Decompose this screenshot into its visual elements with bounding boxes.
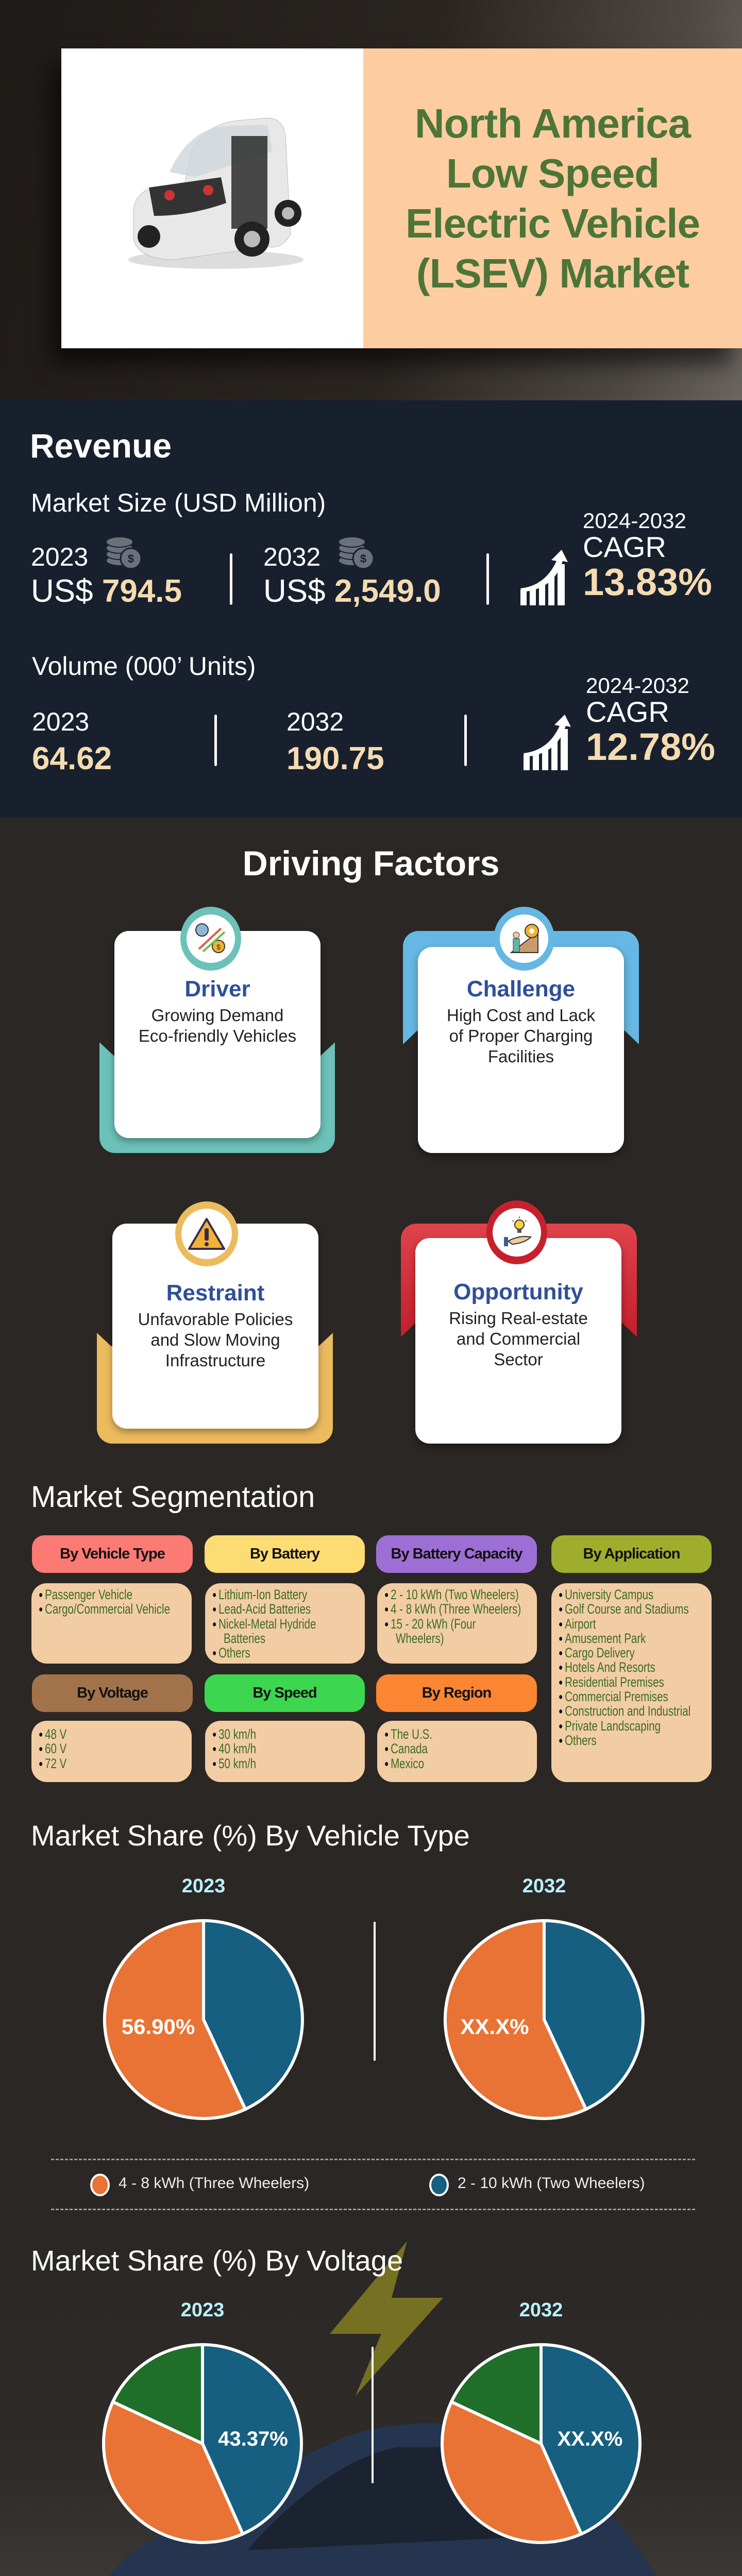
- panel: opportunity: Sector: [494, 1350, 543, 1369]
- panel: challenge: High Cost and Lack: [447, 1006, 595, 1025]
- seg header: vehicle type: By Vehicle Type: [60, 1546, 165, 1562]
- panel: restraint: Infrastructure: [165, 1351, 265, 1370]
- chart: vehicle type 2032: [443, 1875, 645, 2120]
- seg list: battery: Lithium-Ion Battery: [218, 1587, 307, 1602]
- stat: revenue CAGR: CAGR: [583, 531, 666, 563]
- stat: 2023 volume: [32, 707, 112, 776]
- legend: vehicle type: 4 - 8 kWh (Three Wheelers): [119, 2175, 309, 2192]
- seg list: region: Mexico: [391, 1756, 424, 1771]
- seg list: application: Private Landscaping: [565, 1718, 661, 1734]
- icon: opportunity: [486, 1200, 547, 1264]
- panel: driver: Growing Demand: [151, 1006, 283, 1025]
- seg header: voltage: [32, 1674, 193, 1712]
- icon: coins: [339, 537, 373, 568]
- seg list: voltage: [31, 1721, 192, 1782]
- stat: 2032 volume: 2032: [286, 707, 344, 736]
- heading: market share by vehicle type: Market Share (%) By Vehicle Type: [31, 1819, 470, 1852]
- heading: market segmentation: Market Segmentation: [31, 1480, 315, 1514]
- heading: driving factors: Driving Factors: [243, 844, 499, 883]
- divider: [464, 715, 467, 766]
- chart: voltage 2023: 2023: [181, 2299, 224, 2321]
- stat: 2032 volume: [286, 707, 384, 776]
- seg list: application: University Campus: [565, 1587, 653, 1602]
- seg list: application: Golf Course and Stadiums: [565, 1601, 689, 1617]
- seg list: region: Canada: [391, 1741, 428, 1756]
- seg list: voltage: 48 V: [45, 1726, 66, 1742]
- stat: volume CAGR: [524, 673, 715, 770]
- chart: vehicle type 2032: 2032: [522, 1875, 566, 1897]
- stat: volume CAGR: CAGR: [586, 696, 669, 728]
- chart: vehicle type 2023: [103, 1875, 304, 2120]
- seg list: battery capacity: [377, 1583, 537, 1664]
- seg list: application: Amusement Park: [565, 1631, 646, 1646]
- seg list: application: Commercial Premises: [565, 1689, 668, 1704]
- icon: driver: $: [216, 943, 221, 951]
- divider: [374, 1922, 376, 2061]
- icon: challenge: [494, 907, 554, 971]
- panel: challenge: [403, 907, 639, 1156]
- seg list: application: Airport: [565, 1616, 596, 1632]
- icon: low speed vehicle: [128, 117, 303, 269]
- icon: lightning bolt: [330, 2241, 443, 2396]
- legend: vehicle type: 2 - 10 kWh (Two Wheelers): [458, 2175, 645, 2192]
- chart: vehicle type 2023: 2023: [182, 1875, 225, 1897]
- seg header: battery: By Battery: [250, 1546, 319, 1562]
- legend: vehicle type: [51, 2159, 695, 2210]
- seg list: vehicle type: Passenger Vehicle: [45, 1587, 132, 1602]
- panel: restraint: Unfavorable Policies: [138, 1310, 293, 1329]
- stat: 2023 revenue: US$ 794.5: [31, 573, 182, 609]
- chart: voltage 2032: 2032: [519, 2299, 563, 2321]
- stat: volume CAGR: 2024-2032: [586, 673, 689, 698]
- seg header: application: By Application: [583, 1546, 680, 1562]
- title text panel: (LSEV) Market: [416, 250, 689, 296]
- title banner: [61, 48, 742, 348]
- panel: driver: Driver: [184, 976, 250, 1002]
- seg list: battery capacity: 15 - 20 kWh (Four: [391, 1616, 476, 1632]
- seg list: speed: 40 km/h: [218, 1741, 256, 1756]
- header background: [0, 0, 742, 400]
- text: volume label: Volume (000’ Units): [32, 652, 256, 681]
- stat: 2023 revenue: [31, 537, 182, 609]
- seg header: application: [551, 1535, 712, 1573]
- panel: opportunity: Opportunity: [453, 1279, 583, 1304]
- title text panel: Low Speed: [446, 150, 659, 196]
- seg list: battery: [205, 1583, 365, 1664]
- seg list: speed: 30 km/h: [218, 1726, 256, 1742]
- seg list: battery: Batteries: [224, 1631, 265, 1646]
- seg list: region: [377, 1721, 537, 1782]
- icon: coins: [107, 537, 140, 568]
- icon: warning: [175, 1201, 238, 1266]
- stat: 2032 revenue: US$ 2,549.0: [263, 573, 441, 609]
- stat: 2023 volume: 64.62: [32, 741, 112, 776]
- seg list: application: Cargo Delivery: [565, 1645, 635, 1660]
- seg list: application: Others: [565, 1733, 597, 1748]
- stat: 2023 volume: 2023: [32, 707, 89, 736]
- title text panel: North America: [415, 100, 690, 146]
- chart: voltage 2032: [441, 2299, 642, 2544]
- seg list: battery capacity: 2 - 10 kWh (Two Wheelers): [391, 1587, 519, 1602]
- panel: segmentation: [31, 1535, 712, 1782]
- heading: market share by voltage: Market Share (%) By Voltage: [31, 2244, 403, 2277]
- seg list: voltage: 72 V: [45, 1756, 66, 1771]
- divider: [486, 553, 489, 605]
- stat: revenue CAGR: [520, 509, 712, 605]
- panel: restraint: and Slow Moving: [150, 1330, 280, 1349]
- panel: restraint: Restraint: [166, 1280, 264, 1306]
- seg list: battery capacity: 4 - 8 kWh (Three Wheelers): [391, 1601, 521, 1617]
- seg header: region: By Region: [422, 1685, 491, 1701]
- seg header: speed: [205, 1674, 365, 1712]
- icon: electric car: [109, 2423, 655, 2576]
- seg list: speed: 50 km/h: [218, 1756, 256, 1771]
- chart: voltage 2032: XX.X%: [558, 2428, 622, 2450]
- stat: volume CAGR: 12.78%: [586, 725, 715, 768]
- panel: challenge: Challenge: [467, 976, 575, 1002]
- panel: challenge: of Proper Charging: [449, 1026, 593, 1045]
- icon: coins: $: [128, 552, 134, 565]
- seg header: region: [376, 1674, 537, 1712]
- heading: revenue: Revenue: [30, 427, 172, 465]
- chart: vehicle type 2032: XX.X%: [460, 2014, 529, 2039]
- stat: 2023 revenue: 2023: [31, 543, 88, 571]
- seg header: battery: [205, 1535, 365, 1573]
- text: market size label: Market Size (USD Million): [31, 488, 326, 517]
- seg list: application: Hotels And Resorts: [565, 1659, 655, 1675]
- icon: growth chart: [520, 550, 568, 605]
- title text panel: [363, 48, 742, 348]
- seg list: application: Residential Premises: [565, 1674, 664, 1690]
- seg list: battery: Nickel-Metal Hydride: [218, 1616, 316, 1632]
- stat: 2032 revenue: 2032: [263, 543, 321, 571]
- chart: vehicle type 2023: 56.90%: [122, 2014, 195, 2039]
- divider: [230, 553, 232, 605]
- seg header: voltage: By Voltage: [77, 1685, 148, 1701]
- car image panel: [61, 48, 363, 348]
- panel: challenge: Facilities: [488, 1047, 554, 1066]
- seg list: battery: Lead-Acid Batteries: [218, 1601, 311, 1617]
- seg header: vehicle type: [32, 1535, 193, 1573]
- seg list: battery capacity: Wheelers): [396, 1631, 444, 1646]
- seg header: battery capacity: By Battery Capacity: [391, 1546, 522, 1562]
- panel: opportunity: Rising Real-estate: [449, 1309, 588, 1328]
- stat: 2032 volume: 190.75: [286, 741, 384, 776]
- seg list: region: The U.S.: [391, 1726, 432, 1742]
- seg list: application: [551, 1583, 712, 1782]
- icon: driver: [180, 907, 241, 971]
- seg list: vehicle type: Cargo/Commercial Vehicle: [45, 1601, 170, 1617]
- panel: revenue: [0, 400, 742, 818]
- panel: restraint: [97, 1201, 333, 1444]
- panel: driver: [99, 907, 335, 1153]
- chart: voltage 2023: 43.37%: [218, 2428, 288, 2450]
- seg list: speed: [205, 1721, 365, 1782]
- seg list: vehicle type: [31, 1583, 192, 1664]
- divider: [214, 715, 217, 766]
- seg list: battery: Others: [218, 1645, 250, 1660]
- voltage section background with car: [0, 2215, 742, 2576]
- icon: coins: $: [360, 552, 366, 565]
- divider: [372, 2347, 374, 2483]
- panel: opportunity: and Commercial: [457, 1329, 580, 1348]
- seg header: speed: By Speed: [252, 1685, 317, 1701]
- seg list: voltage: 60 V: [45, 1741, 66, 1756]
- stat: revenue CAGR: 13.83%: [583, 561, 712, 603]
- seg header: battery capacity: [376, 1535, 537, 1573]
- title text panel: Electric Vehicle: [406, 200, 700, 246]
- stat: 2032 revenue: [263, 537, 441, 609]
- panel: driver: Eco-friendly Vehicles: [139, 1026, 296, 1045]
- stat: revenue CAGR: 2024-2032: [583, 509, 686, 533]
- icon: growth chart: [524, 715, 571, 770]
- chart: voltage 2023: [102, 2299, 303, 2544]
- seg list: application: Construction and Industrial: [565, 1703, 690, 1719]
- panel: opportunity: [401, 1200, 637, 1446]
